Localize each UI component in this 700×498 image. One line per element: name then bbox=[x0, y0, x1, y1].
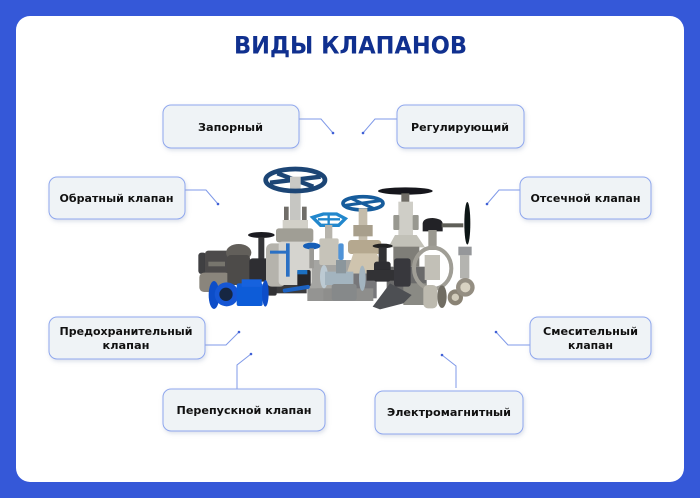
label: Смесительный клапан: клапан bbox=[568, 339, 613, 352]
blue pipe handle bbox=[283, 285, 310, 293]
label: Электромагнитный bbox=[375, 354, 523, 434]
title: ВИДЫ КЛАПАНОВ bbox=[234, 32, 467, 60]
grey Y-strainer bbox=[373, 283, 412, 309]
label: Перепускной клапан: Перепускной клапан bbox=[176, 404, 312, 417]
small dark gate valve bbox=[248, 232, 275, 238]
label: Электромагнитный: Электромагнитный bbox=[387, 406, 511, 419]
label: Предохранительный клапан: клапан bbox=[102, 339, 150, 352]
label: Обратный клапан bbox=[49, 177, 219, 219]
label: Запорный: Запорный bbox=[198, 121, 263, 134]
middle gate valve bbox=[343, 197, 383, 210]
backing cluster filling the gaps bbox=[310, 260, 353, 292]
label: Смесительный клапан bbox=[495, 317, 651, 359]
dark forged valves bbox=[373, 244, 393, 248]
label: Смесительный клапан: Смесительный bbox=[543, 325, 638, 338]
label: Предохранительный клапан: Предохранительный bbox=[60, 325, 192, 338]
label: Отсечной клапан: Отсечной клапан bbox=[530, 192, 640, 205]
label: Предохранительный клапан bbox=[49, 317, 240, 359]
label: Перепускной клапан bbox=[163, 353, 325, 431]
label: Отсечной клапан bbox=[486, 177, 651, 219]
big gate valve bbox=[266, 243, 286, 287]
label: Регулирующий: Регулирующий bbox=[411, 121, 509, 134]
right gate valve with black wheel bbox=[378, 187, 433, 195]
valves illustration bbox=[198, 169, 475, 309]
label: Обратный клапан: Обратный клапан bbox=[60, 192, 174, 205]
label: Регулирующий bbox=[362, 105, 524, 148]
butterfly valve with gear bbox=[423, 218, 443, 231]
silver ball valves bbox=[320, 265, 328, 288]
label: Запорный bbox=[163, 105, 334, 148]
blue check valves bbox=[209, 281, 219, 309]
left dark check valves bbox=[198, 253, 206, 274]
big blue handwheel bbox=[266, 169, 325, 191]
small blue valve center bbox=[313, 214, 345, 225]
